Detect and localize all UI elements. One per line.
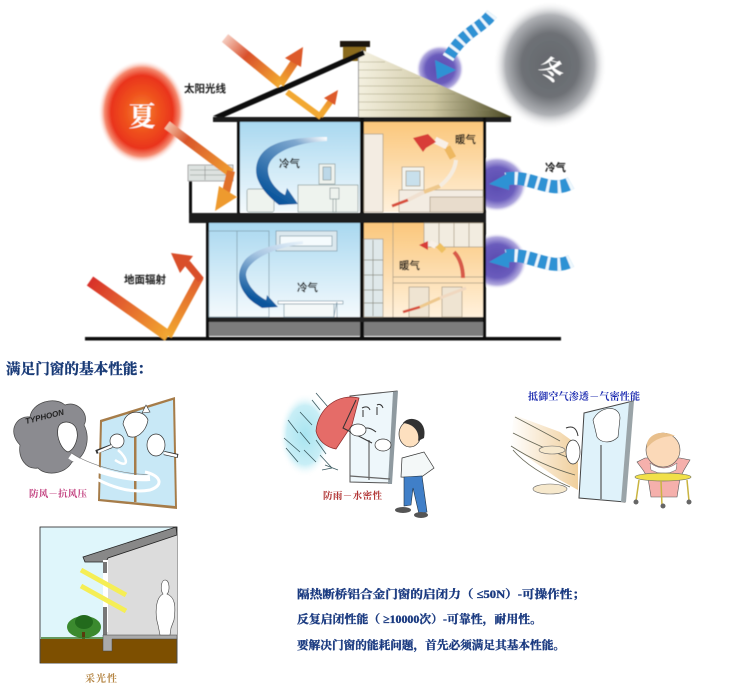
arrow: solar ray into balcony [167, 125, 237, 211]
furniture: upper warm room [364, 134, 483, 212]
arrow: warm air upper room [392, 134, 456, 206]
roof and wall [83, 527, 177, 651]
note: conclusion: 要解决门窗的能耗问题，首先必须满足其基本性能。 [297, 638, 565, 652]
arrow: warm air lower room [403, 241, 466, 312]
icon: AC unit on balcony [188, 165, 233, 181]
icon: winter cloud [493, 1, 607, 129]
icon: person silhouette [156, 580, 175, 635]
label: warm air upper: 暖气 [455, 133, 476, 146]
panel: wind resistance cartoon [14, 397, 178, 509]
icon: window character [96, 397, 178, 509]
icon: summer sun: 夏 [128, 102, 156, 132]
arrow: cold air from winter cloud [435, 14, 492, 79]
caption: water tightness: 防雨－水密性 [323, 490, 382, 502]
caption: air tightness: 抵御空气渗透－气密性能 [528, 390, 640, 403]
label: cold air outside: 冷气 [545, 161, 566, 174]
house structure [85, 41, 561, 340]
icon: typhoon cloud [14, 401, 87, 473]
furniture: lower cool room [209, 231, 343, 317]
note: operating force: 隔热断桥铝合金门窗的启闭力（ ≤50N）-可操作性； [297, 587, 585, 601]
icon: red umbrella [316, 397, 391, 451]
panel: daylighting diagram [40, 527, 177, 663]
sunlight beams [81, 570, 126, 611]
icon: window character [350, 391, 398, 484]
heading: 满足门窗的基本性能： [6, 360, 152, 378]
label: solar rays: 太阳光线 [184, 82, 226, 95]
arrow: cool air upper room [256, 137, 327, 205]
caption: wind pressure: 防风－抗风压 [29, 488, 87, 500]
icon: wind gusts [70, 450, 159, 491]
label: cool air upper: 冷气 [279, 157, 300, 170]
furniture: lower warm room [364, 223, 483, 317]
arrow: solar ray reflected from roof [225, 38, 303, 84]
rain streaks [284, 393, 338, 470]
note: durability: 反复启闭性能（ ≥10000次）-可靠性，耐用性。 [297, 612, 542, 626]
arrow: cold air upper wall [489, 172, 571, 190]
icon: summer sun [98, 60, 186, 164]
icon: wind gusts [510, 415, 578, 494]
ground [40, 639, 176, 663]
icon: man [395, 419, 434, 518]
furniture: upper cool room [247, 164, 358, 212]
label: cool air lower: 冷气 [297, 281, 318, 294]
icon: typhoon cloud: TYPHOON [24, 408, 65, 426]
rain background [279, 393, 331, 477]
panel: water tightness cartoon [279, 391, 434, 518]
label: ground radiation: 地面辐射 [124, 273, 166, 286]
icon: cold impact blobs [416, 45, 527, 289]
arrow: cold air lower wall [489, 250, 571, 268]
panel: air tightness cartoon [510, 390, 692, 508]
sky background [40, 527, 177, 663]
text block: performance notes [297, 587, 585, 652]
arrow: ground radiation [90, 253, 201, 336]
panel: house energy diagram [85, 1, 607, 340]
arrow: cool air lower room [239, 241, 303, 308]
label: warm air lower: 暖气 [399, 259, 420, 272]
icon: winter cloud: 冬 [535, 53, 567, 88]
icon: baby in walker [634, 433, 692, 508]
icon: tree [41, 615, 103, 639]
icon: window character [566, 401, 634, 502]
caption: daylighting: 采光性 [85, 672, 117, 685]
building interior [107, 535, 177, 636]
arrow: transmitted solar ray under roof [287, 90, 338, 117]
